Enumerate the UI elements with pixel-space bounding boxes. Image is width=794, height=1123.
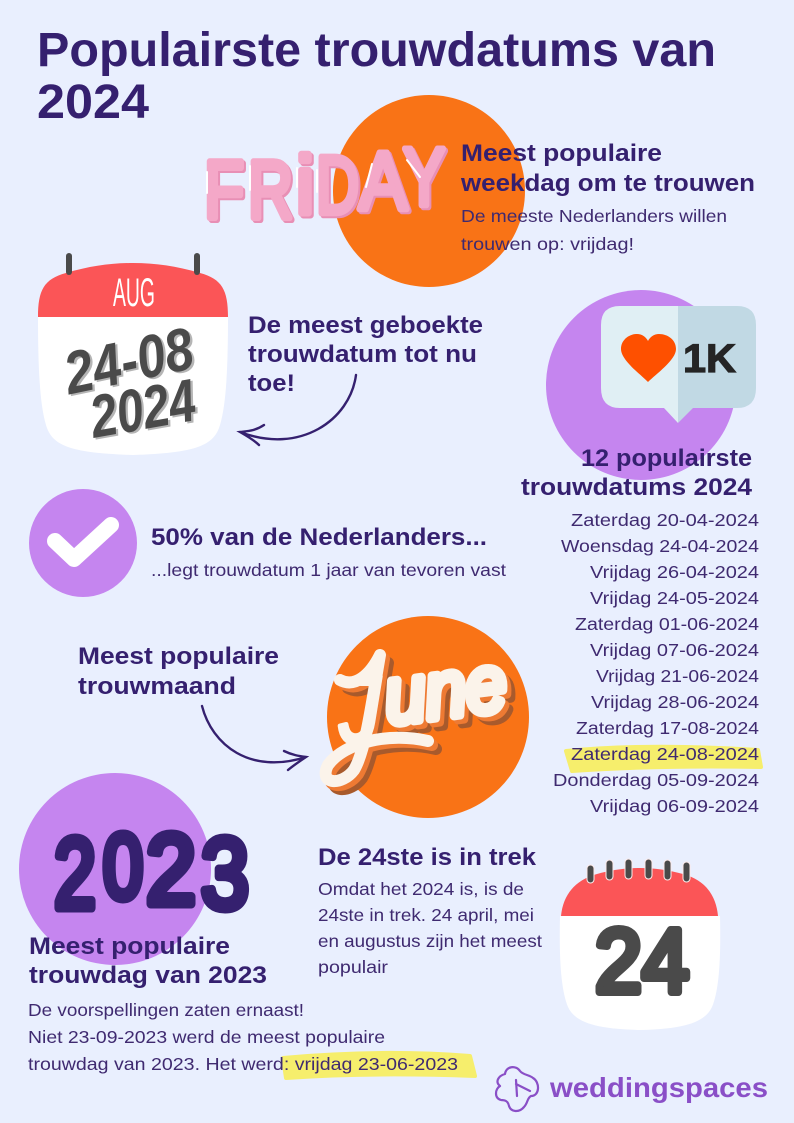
June lettering <box>326 638 519 789</box>
heading: Meest populaire <box>29 933 230 960</box>
date list: Vrijdag 07-06-2024 <box>590 640 759 660</box>
heading: trouwmaand <box>78 673 236 700</box>
FRIDAY lettering: F <box>206 147 246 238</box>
body text: De voorspellingen zaten ernaast! <box>28 1000 304 1020</box>
FRIDAY lettering: Y <box>403 132 445 223</box>
icon: like bubble 1K <box>601 306 756 423</box>
FRIDAY lettering: i <box>296 140 314 231</box>
body text: De meeste Nederlanders willen <box>461 206 727 226</box>
title: Populairste trouwdatums van <box>37 24 716 77</box>
FRIDAY lettering: A <box>359 136 407 227</box>
2023 lettering: 2 <box>146 814 196 926</box>
icon: calendar 24-08-2024: 2024 <box>84 366 201 451</box>
FRIDAY lettering: R <box>248 145 293 236</box>
title <box>37 24 716 129</box>
icon: check circle <box>29 489 137 597</box>
heading <box>29 933 267 989</box>
panel: 12 popular dates <box>521 290 761 816</box>
highlight <box>566 747 761 771</box>
icon: calendar 24-08-2024: 24-08 <box>60 316 202 409</box>
icon: calendar 24-08-2024: 2024 <box>86 368 203 452</box>
date list <box>553 510 759 816</box>
logo: weddingspaces <box>496 1067 768 1111</box>
title: 2024 <box>37 76 149 129</box>
heading <box>521 445 753 501</box>
FRIDAY lettering: F <box>204 145 244 236</box>
heading: weekdag om te trouwen <box>460 170 755 197</box>
heading: Meest populaire <box>78 643 279 670</box>
heading <box>248 312 483 397</box>
heading: 12 populairste <box>581 445 752 472</box>
icon: calendar 24 <box>560 859 720 1030</box>
date list: Vrijdag 21-06-2024 <box>596 666 759 686</box>
body text: populair <box>318 957 388 977</box>
panel: most popular day of 2023 <box>19 773 475 1078</box>
2023 lettering <box>54 814 249 930</box>
FRIDAY lettering: i <box>298 142 316 233</box>
June lettering: une <box>383 642 515 745</box>
purple circle <box>546 290 736 480</box>
panel: the 24th is popular <box>318 844 720 1030</box>
body text: Omdat het 2024 is, is de <box>318 879 524 899</box>
heading <box>78 643 279 700</box>
arrow <box>240 375 356 445</box>
highlight <box>283 1053 475 1078</box>
FRIDAY lettering: A <box>361 138 409 229</box>
panel: 50 percent <box>29 489 506 597</box>
body text <box>461 206 727 254</box>
panel: most popular weekday <box>204 95 755 287</box>
panel: most popular month <box>78 616 529 818</box>
date list: Zaterdag 20-04-2024 <box>571 510 759 530</box>
icon: like bubble 1K: 1K <box>683 337 736 381</box>
date list: Vrijdag 06-09-2024 <box>590 796 759 816</box>
purple circle <box>19 773 211 965</box>
date list: Woensdag 24-04-2024 <box>561 536 759 556</box>
body text: 24ste in trek. 24 april, mei <box>318 905 534 925</box>
body text: trouwdag van 2023. Het werd: vrijdag 23-06-2023 <box>28 1054 458 1074</box>
FRIDAY lettering: R <box>250 147 295 238</box>
orange circle <box>333 95 525 287</box>
body text: en augustus zijn het meest <box>318 931 542 951</box>
body text <box>28 1000 458 1074</box>
body text: trouwen op: vrijdag! <box>461 234 634 254</box>
FRIDAY lettering: Y <box>405 134 447 225</box>
FRIDAY lettering: D <box>316 140 359 231</box>
wordmark: weddingspaces <box>549 1072 768 1103</box>
date list: Vrijdag 24-05-2024 <box>590 588 759 608</box>
icon: calendar 24-08-2024: 24-08 <box>57 315 200 407</box>
2023 lettering: 3 <box>201 818 249 930</box>
heading: trouwdatum tot nu <box>248 341 477 368</box>
heading <box>460 140 755 197</box>
date list: Zaterdag 01-06-2024 <box>575 614 759 634</box>
FRIDAY lettering: D <box>318 142 361 233</box>
J initial as real text, blended into the swash: J <box>339 656 381 763</box>
date list: Vrijdag 26-04-2024 <box>590 562 759 582</box>
arrow <box>202 706 306 770</box>
date list: Zaterdag 17-08-2024 <box>576 718 759 738</box>
icon: flower mark <box>496 1067 538 1111</box>
heading: Meest populaire <box>461 140 662 167</box>
June lettering: une <box>387 646 519 749</box>
icon: calendar 24-08-2024 <box>38 253 228 455</box>
panel: most booked date <box>38 253 483 455</box>
date list: Vrijdag 28-06-2024 <box>591 692 759 712</box>
icon: calendar 24-08-2024: AUG <box>113 271 155 315</box>
2023 lettering: 2 <box>54 818 96 930</box>
June lettering: une <box>379 638 511 741</box>
heading: toe! <box>248 370 295 397</box>
heading: 50% van de Nederlanders... <box>151 524 487 551</box>
icon: calendar 24: 24 <box>595 912 689 1012</box>
heading: De meest geboekte <box>248 312 483 339</box>
2023 lettering: 0 <box>103 816 143 918</box>
heading: trouwdatums 2024 <box>521 474 753 501</box>
heading: trouwdag van 2023 <box>29 962 267 989</box>
body text: ...legt trouwdatum 1 jaar van tevoren vast <box>151 560 506 580</box>
body text: Niet 23-09-2023 werd de meest populaire <box>28 1027 385 1047</box>
date list: Donderdag 05-09-2024 <box>553 770 759 790</box>
FRIDAY lettering <box>204 132 447 238</box>
heading: De 24ste is in trek <box>318 844 537 871</box>
date list: Zaterdag 24-08-2024 <box>571 744 759 764</box>
orange circle <box>327 616 529 818</box>
body text <box>318 879 542 977</box>
